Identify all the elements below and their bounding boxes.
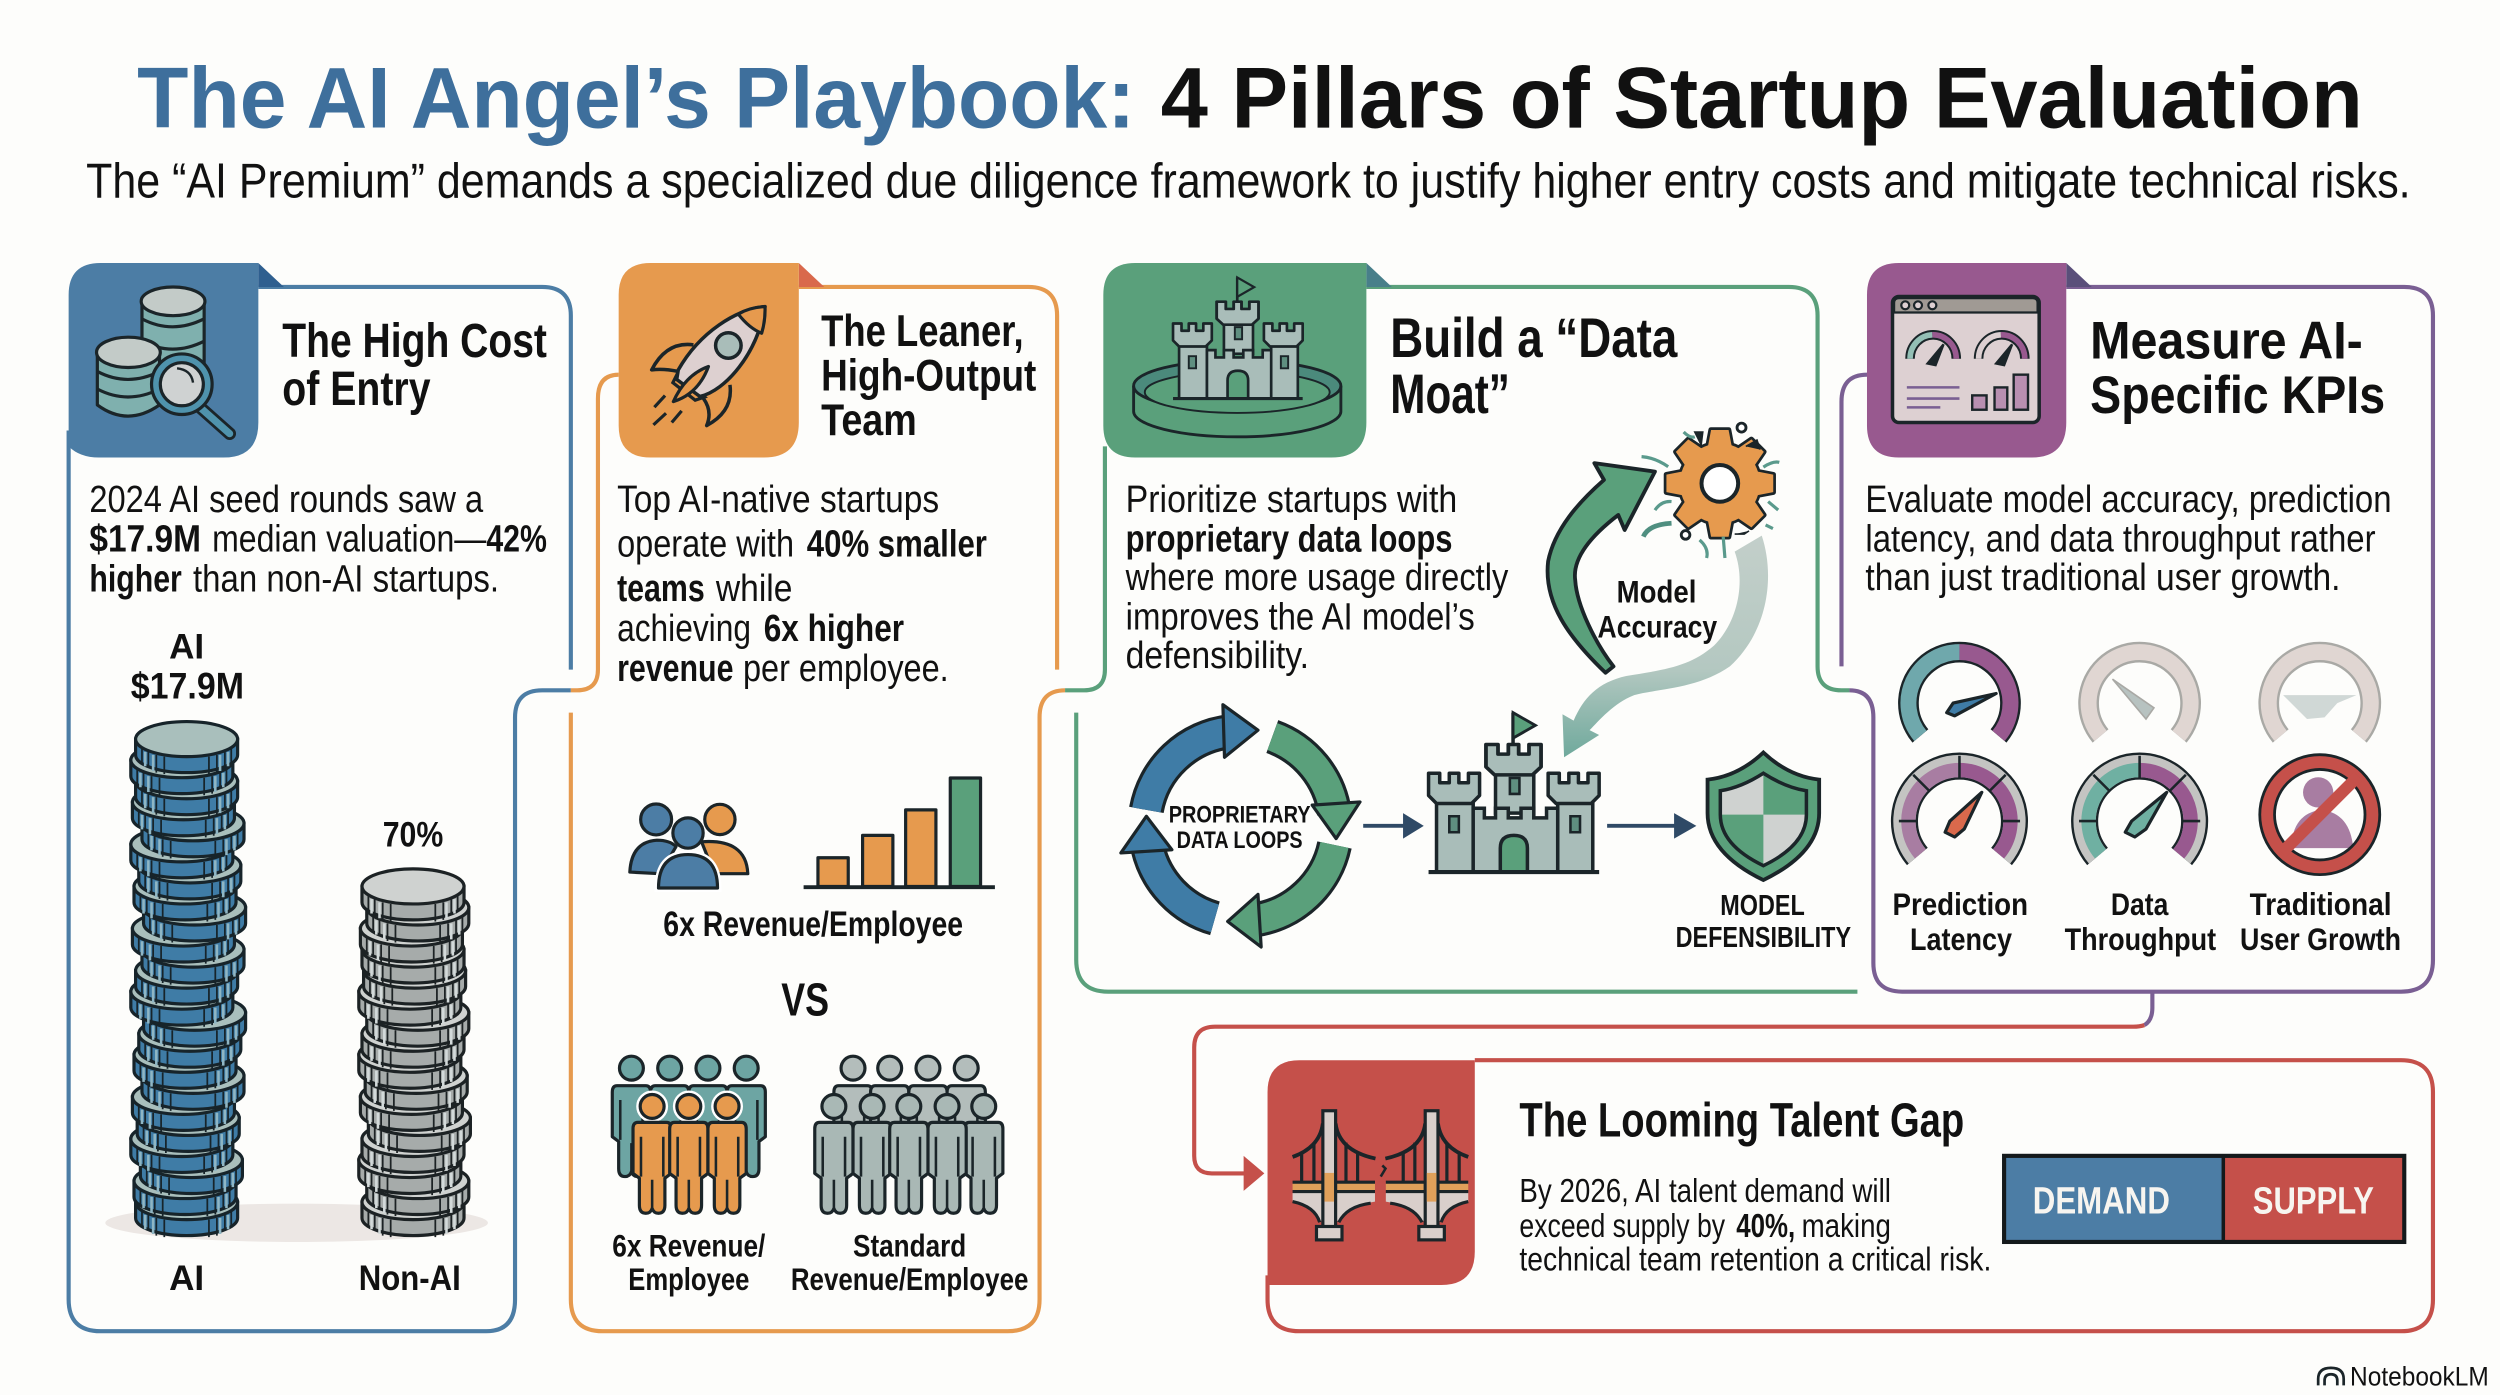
- heading: High-Output: [821, 352, 1036, 401]
- gauge labels: [1892, 886, 2401, 957]
- team labels: [612, 1227, 1028, 1297]
- gauge labels: Prediction: [1892, 886, 2028, 922]
- chart labels: AI: [169, 1259, 204, 1298]
- text block: defensibility.: [1126, 634, 1309, 677]
- icon: team of three: [630, 804, 748, 888]
- icon: small AI team: [612, 1056, 765, 1213]
- team labels: Standard: [853, 1227, 966, 1263]
- gauge: top left: [1908, 652, 2010, 736]
- heading: [1390, 306, 1678, 425]
- team labels: Revenue/Employee: [791, 1261, 1028, 1297]
- diagram: proprietary data loops cycle: [1121, 705, 1360, 947]
- heading: Moat”: [1390, 362, 1510, 425]
- label: model defensibility: MODEL: [1720, 890, 1805, 922]
- text block: making: [1802, 1208, 1891, 1245]
- coin stack: non-AI: [359, 869, 470, 1237]
- chart labels: $17.9M: [131, 665, 244, 706]
- gauge labels: Data: [2111, 886, 2169, 922]
- panel: measure AI-specific KPIs: [1841, 263, 2433, 992]
- gauge: prediction latency: [1899, 756, 2020, 856]
- text block: [1519, 1173, 1991, 1279]
- icon: gear: [1642, 423, 1779, 558]
- text block: teams: [617, 567, 705, 610]
- heading: Team: [821, 396, 917, 445]
- text block: per employee.: [743, 647, 949, 690]
- chart: coin stacks comparison: [105, 627, 488, 1298]
- text block: while: [715, 567, 792, 610]
- text block: 6x higher: [764, 607, 904, 650]
- chart: demand versus supply bar: DEMAND: [2033, 1179, 2170, 1222]
- text block: [617, 478, 987, 690]
- icon: red tab with broken bridge: [1268, 1060, 1475, 1285]
- text block: $17.9M: [89, 518, 201, 561]
- text block: [1125, 478, 1509, 677]
- text block: median valuation—: [212, 518, 487, 561]
- icon: purple tab with dashboard: [1867, 263, 2066, 458]
- title: [137, 51, 2363, 147]
- heading: Specific KPIs: [2090, 366, 2385, 425]
- text block: proprietary data loops: [1126, 518, 1452, 561]
- gauge labels: Throughput: [2065, 921, 2216, 957]
- text block: latency, and data throughput rather: [1865, 518, 2376, 561]
- arrow: loops to castle: [1363, 813, 1424, 839]
- panel: build a data moat: [1065, 263, 1857, 992]
- heading: The Looming Talent Gap: [1519, 1095, 1964, 1148]
- gauge: data throughput: [2079, 756, 2200, 856]
- text block: By 2026, AI talent demand will: [1519, 1173, 1891, 1210]
- panel: the leaner, high-output team: [571, 263, 1065, 1331]
- chart labels: Non-AI: [359, 1259, 461, 1298]
- chart labels: AI: [169, 627, 204, 666]
- panel: the high cost of entry: [69, 263, 571, 1331]
- icon: traditional user growth prohibited: [2267, 762, 2372, 867]
- arrow: fading curved to castle: [1562, 536, 1768, 757]
- panel: the looming talent gap: [1268, 1060, 2433, 1331]
- heading: The Leaner,: [821, 307, 1024, 356]
- title: 4 Pillars of Startup Evaluation: [1161, 51, 2363, 147]
- text block: 40%,: [1736, 1208, 1795, 1245]
- text block: Prioritize startups with: [1126, 478, 1457, 521]
- text block: 42%: [486, 518, 547, 561]
- chart labels: [131, 627, 461, 1298]
- text block: than just traditional user growth.: [1865, 556, 2340, 599]
- heading: of Entry: [282, 363, 431, 416]
- label: model accuracy: [1598, 574, 1717, 645]
- heading: Measure AI-: [2090, 312, 2363, 371]
- NotebookLM logo: NotebookLM: [2350, 1360, 2489, 1391]
- label: VS: VS: [781, 974, 829, 1026]
- text block: where more usage directly: [1125, 556, 1509, 599]
- arrow: castle to shield: [1607, 813, 1696, 839]
- text block: improves the AI model’s: [1126, 596, 1475, 639]
- title: The AI Angel’s Playbook:: [137, 51, 1135, 147]
- label: model accuracy: Model: [1617, 574, 1696, 610]
- heading: Build a “Data: [1390, 306, 1678, 369]
- text block: technical team retention a critical risk.: [1519, 1242, 1991, 1279]
- gauge labels: Traditional: [2250, 886, 2392, 922]
- gauge: top middle faded: [2089, 652, 2191, 736]
- diagram: proprietary data loops cycle: DATA LOOPS: [1177, 827, 1303, 854]
- text block: 40% smaller: [807, 522, 987, 565]
- label: model accuracy: Accuracy: [1598, 609, 1717, 645]
- text block: Evaluate model accuracy, prediction: [1865, 478, 2392, 521]
- icon: castle: [1429, 713, 1599, 872]
- team labels: 6x Revenue/: [612, 1227, 765, 1263]
- text block: 2024 AI seed rounds saw a: [89, 478, 484, 521]
- chart labels: 70%: [383, 816, 443, 855]
- heading: [2090, 312, 2385, 425]
- heading: The High Cost: [282, 315, 547, 368]
- icon: green tab with castle and moat: [1103, 263, 1366, 458]
- text block: [1865, 478, 2392, 599]
- text block: Top AI-native startups: [617, 478, 939, 521]
- text block: operate with: [617, 522, 794, 565]
- diagram: proprietary data loops cycle: PROPRIETARY: [1169, 802, 1311, 829]
- text block: than non-AI startups.: [193, 557, 499, 600]
- text block: revenue: [617, 647, 733, 690]
- heading: [821, 307, 1036, 445]
- team labels: Employee: [628, 1261, 749, 1297]
- chart: demand versus supply bar: [2004, 1156, 2404, 1242]
- text block: exceed supply by: [1519, 1208, 1725, 1245]
- text block: achieving: [617, 607, 751, 650]
- arrow: connector to talent gap: [1194, 992, 2152, 1191]
- gauge labels: Latency: [1910, 921, 2012, 957]
- gauge labels: User Growth: [2240, 921, 2401, 957]
- coin stack: AI: [131, 722, 246, 1237]
- text block: [89, 478, 547, 600]
- bar chart: revenue per employee: [804, 778, 995, 887]
- icon: blue tab with coin stacks and magnifier: [69, 263, 258, 458]
- heading: [282, 315, 547, 416]
- text block: higher: [89, 557, 182, 600]
- label: model defensibility: DEFENSIBILITY: [1676, 922, 1851, 954]
- icon: orange tab with rocket: [619, 263, 799, 458]
- label: model defensibility: [1676, 890, 1851, 954]
- chart: demand versus supply bar: SUPPLY: [2253, 1179, 2374, 1222]
- icon: shield: [1708, 753, 1819, 880]
- icon: standard larger team: [815, 1056, 1003, 1213]
- arrow: green curved to gear: [1548, 463, 1655, 673]
- label: 6x Revenue/Employee: [663, 905, 963, 944]
- gauge: top right faded: [2269, 652, 2371, 736]
